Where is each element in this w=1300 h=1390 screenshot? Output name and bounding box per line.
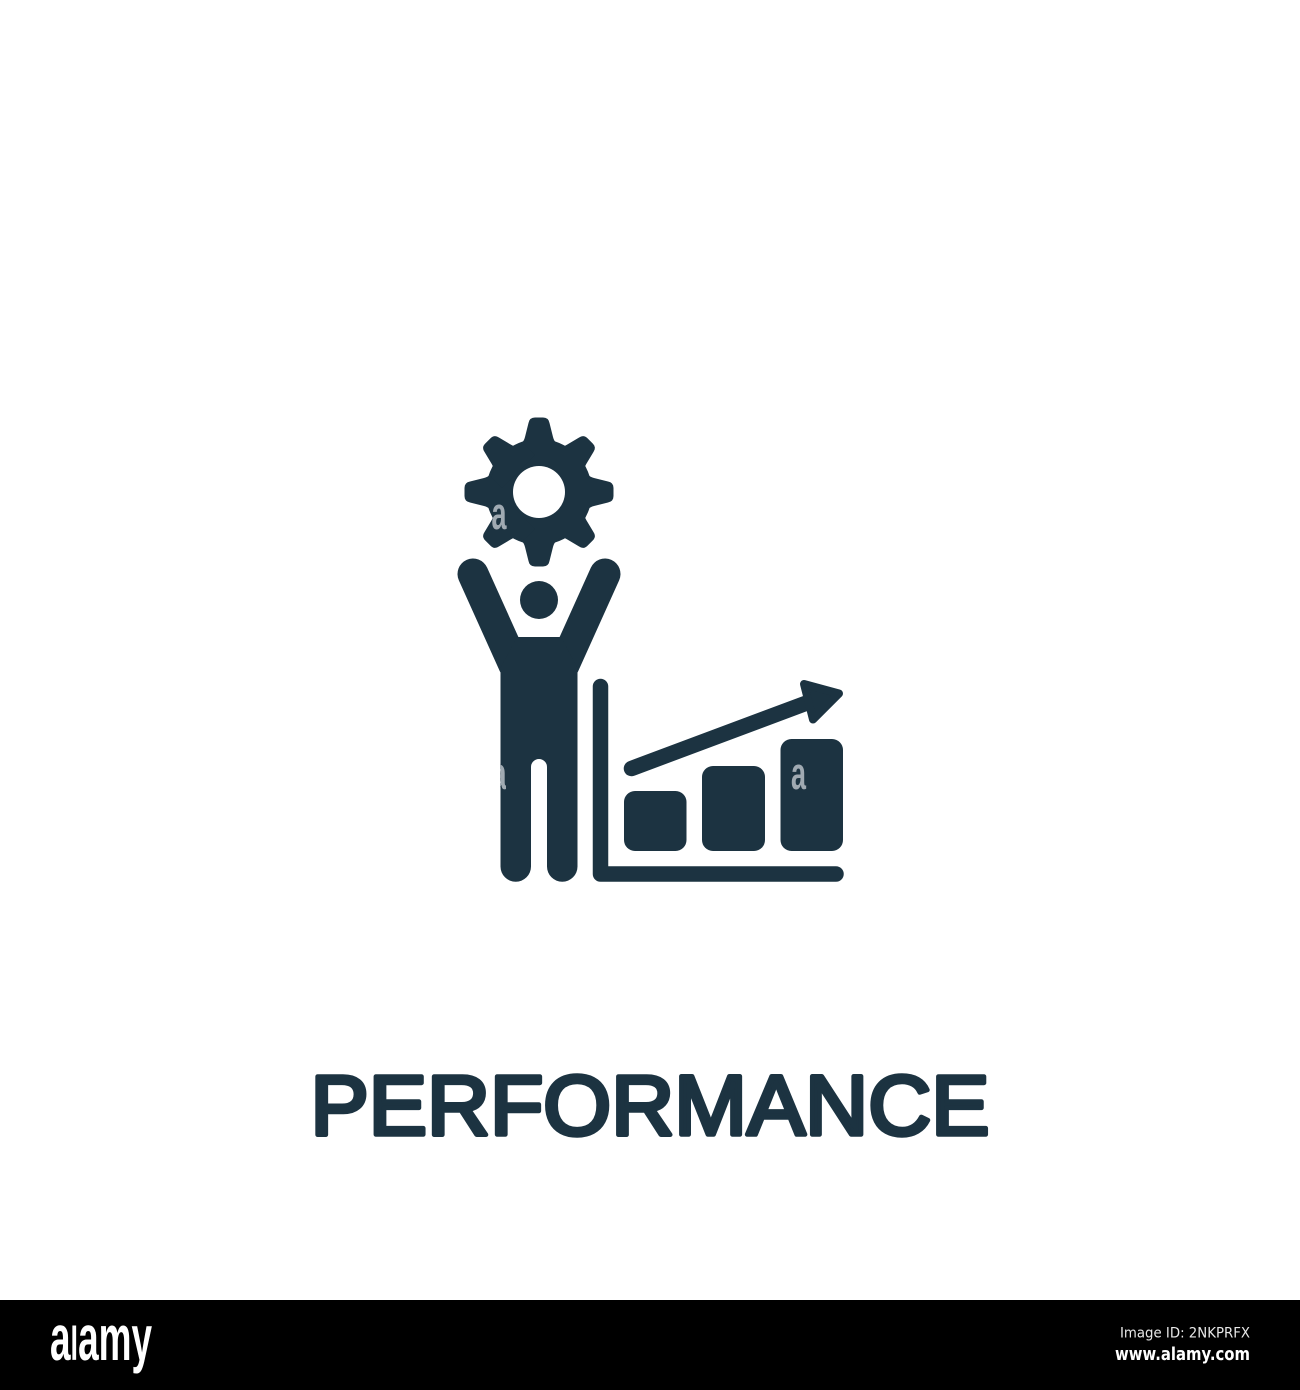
- title: PERFORMANCE: [310, 1058, 990, 1152]
- website: www.alamy.com: [1115, 1344, 1250, 1365]
- watermark glyphs: a: [791, 748, 807, 799]
- watermark glyphs: [492, 488, 807, 799]
- icon: person with raised arms: [473, 574, 605, 882]
- image id: Image ID: 2NKPRFX: [1120, 1326, 1250, 1342]
- watermark glyphs: a: [492, 488, 507, 539]
- footer bar: [0, 1300, 1300, 1390]
- icon: performance pictogram: [464, 418, 843, 882]
- icon: gear: [464, 418, 614, 566]
- footer logo: alamy: [50, 1302, 152, 1374]
- chart: axes: [600, 686, 836, 874]
- watermark glyphs: a: [492, 748, 507, 799]
- chart: rising bars: [624, 739, 843, 851]
- arrow: upward trend: [632, 684, 839, 768]
